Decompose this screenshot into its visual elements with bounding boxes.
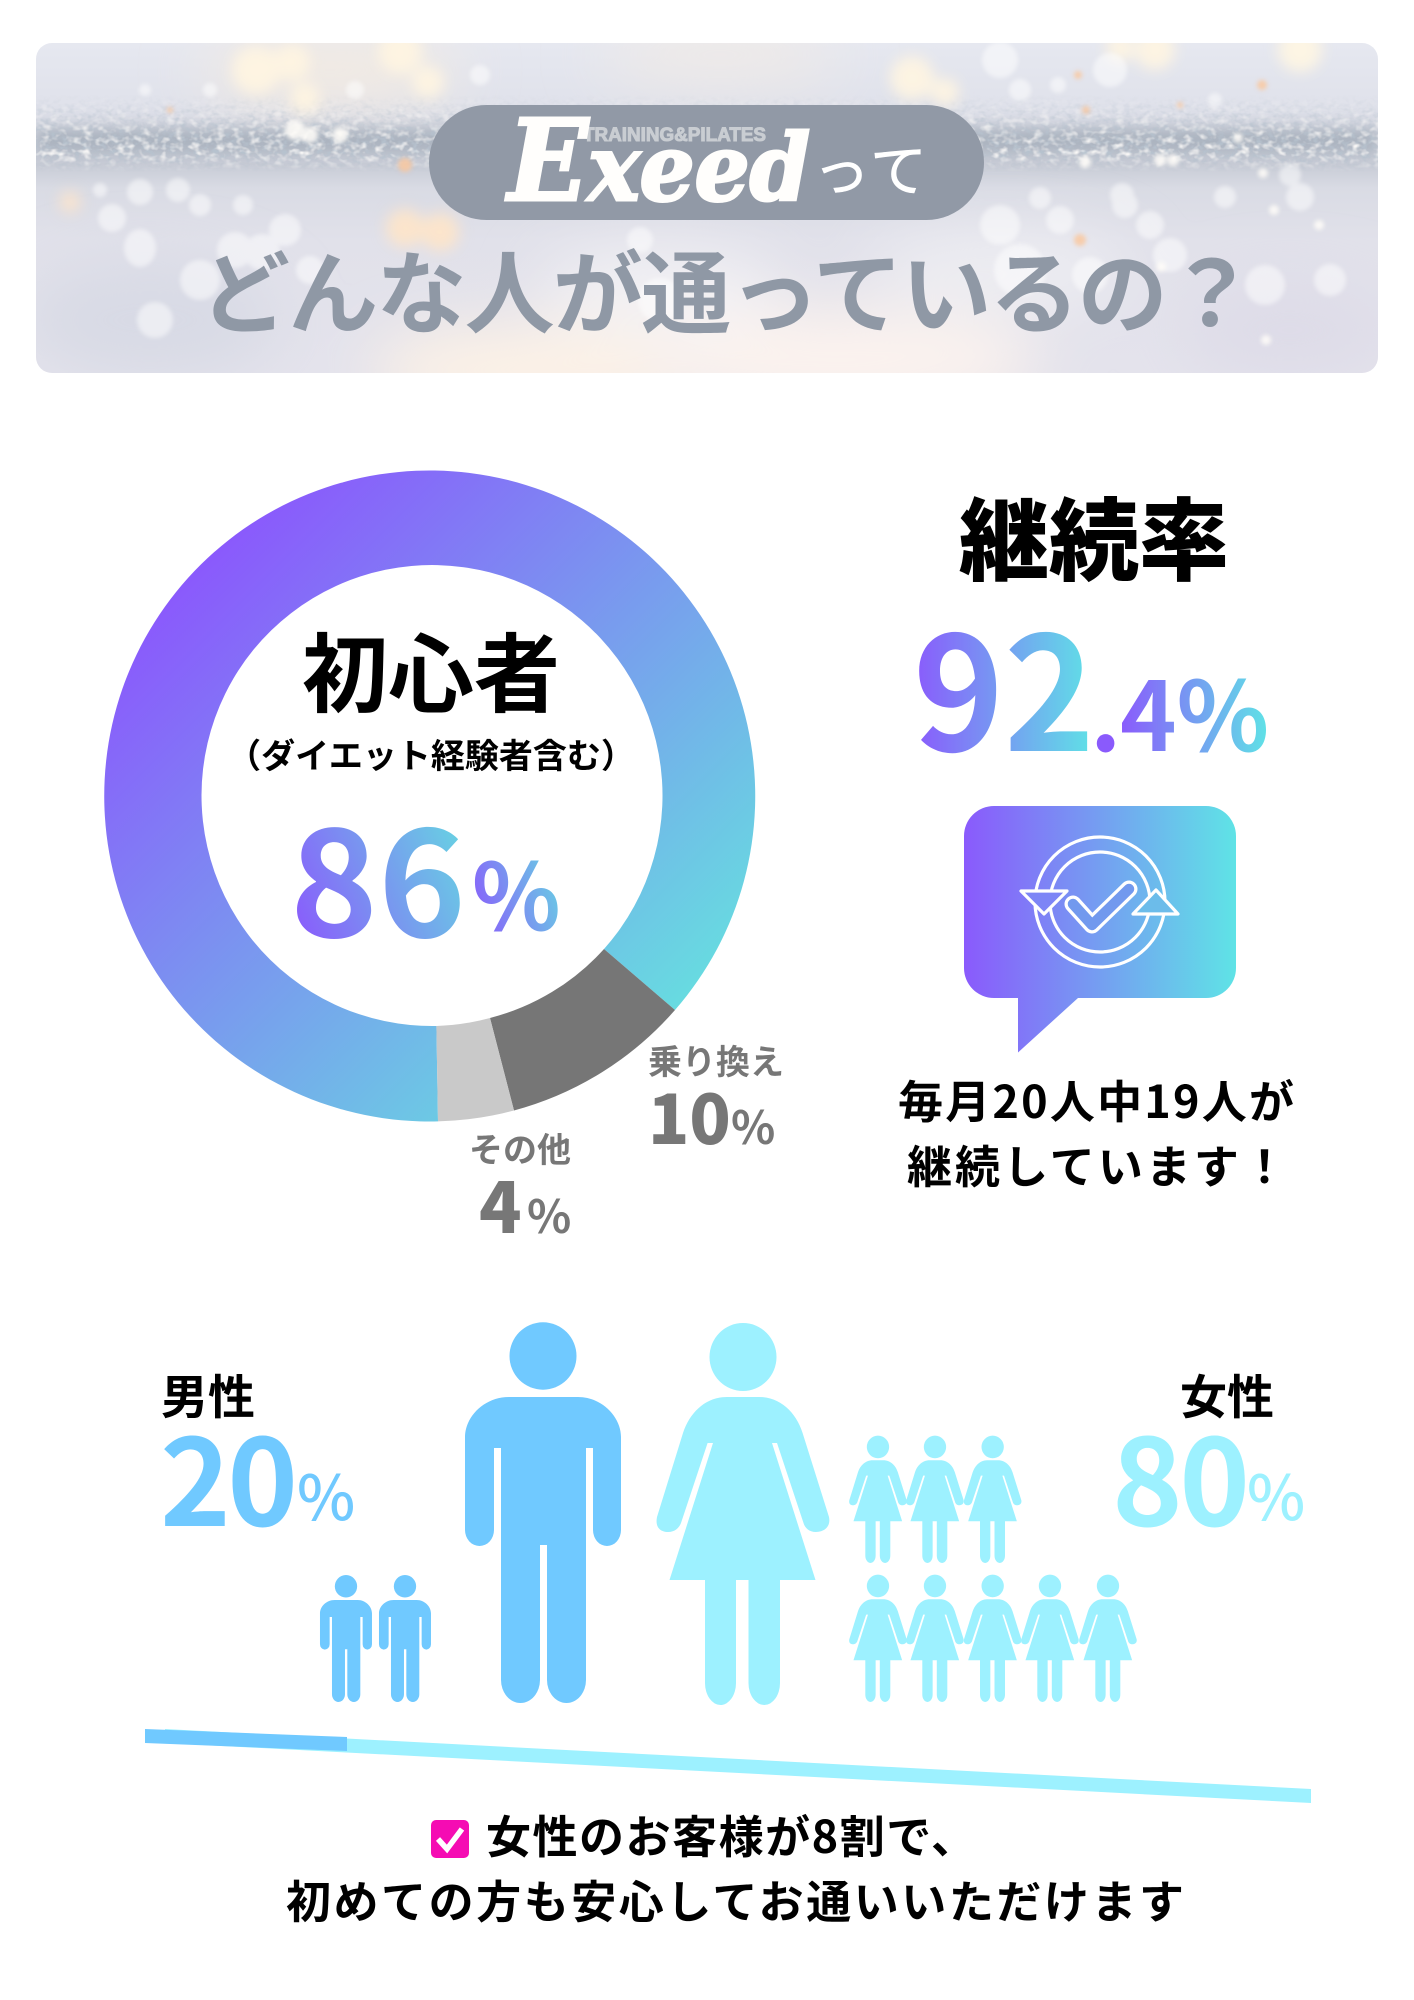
retention value 92.4%: 4% xyxy=(1120,640,1269,779)
donut heading: 初心者 xyxy=(302,605,560,730)
conclusion text: 初めての方も安心してお通いいただけます xyxy=(286,1866,1184,1931)
retention caption xyxy=(898,1066,1294,1196)
retention caption: 継続しています！ xyxy=(907,1131,1287,1196)
retention value 92.4%: 92 xyxy=(913,568,1095,797)
logo text: Exeed: Exeed xyxy=(505,96,810,227)
pill text: って: って xyxy=(813,126,927,208)
bokeh lights xyxy=(60,28,1322,251)
male label 20%: % xyxy=(297,1448,355,1538)
conclusion text xyxy=(286,1801,1184,1931)
donut value 86% xyxy=(290,769,561,980)
female label 80%: 80 xyxy=(1112,1387,1250,1561)
male label 20% xyxy=(160,1359,355,1561)
gender panel xyxy=(145,1322,1311,1803)
donut subheading: （ダイエット経験者含む） xyxy=(227,729,635,778)
label: other xyxy=(469,1123,571,1254)
male label 20%: 20 xyxy=(160,1387,298,1561)
icon: cycle check xyxy=(1021,837,1178,967)
retention caption: 毎月20人中19人が xyxy=(898,1066,1294,1131)
conclusion xyxy=(286,1801,1184,1931)
icons: small men xyxy=(320,1575,431,1702)
donut value 86%: % xyxy=(472,824,561,957)
icon: large man xyxy=(465,1322,621,1703)
label: switchers: % xyxy=(731,1092,775,1158)
retention value 92.4%: . xyxy=(1090,640,1121,779)
banner bokeh background xyxy=(20,28,1400,415)
female label 80% xyxy=(1112,1359,1305,1561)
retention value 92.4% xyxy=(913,568,1269,797)
icon: pink checkbox xyxy=(431,1820,469,1858)
logo pill xyxy=(429,96,984,227)
speech bubble with check icon xyxy=(964,806,1236,1052)
label: switchers xyxy=(648,1035,784,1164)
label: other: % xyxy=(527,1181,571,1247)
conclusion text: 女性のお客様が8割で、 xyxy=(486,1801,976,1866)
female label 80%: 女性 xyxy=(1180,1359,1274,1428)
donut value 86%: 86 xyxy=(290,769,466,980)
retention panel xyxy=(898,469,1294,1196)
segment: switchers 10% xyxy=(490,949,675,1110)
header banner xyxy=(20,28,1400,415)
label: other: 4 xyxy=(479,1153,522,1254)
icon: large woman xyxy=(657,1323,829,1705)
segment: other 4% xyxy=(436,1018,514,1121)
male label 20%: 男性 xyxy=(161,1359,255,1428)
title: どんな人が通っているの？ xyxy=(200,222,1256,352)
ratio bar xyxy=(145,1729,1311,1803)
logo text: TRAINING&PILATES: TRAINING&PILATES xyxy=(583,125,766,146)
label: other: その他 xyxy=(469,1123,571,1172)
label: switchers: 乗り換え xyxy=(648,1035,784,1084)
icons: small women xyxy=(849,1436,1137,1702)
female label 80%: % xyxy=(1247,1448,1305,1538)
donut chart xyxy=(104,471,784,1254)
segment: beginners 86% xyxy=(104,471,755,1122)
retention heading: 継続率 xyxy=(959,469,1229,599)
label: switchers: 10 xyxy=(648,1065,731,1164)
